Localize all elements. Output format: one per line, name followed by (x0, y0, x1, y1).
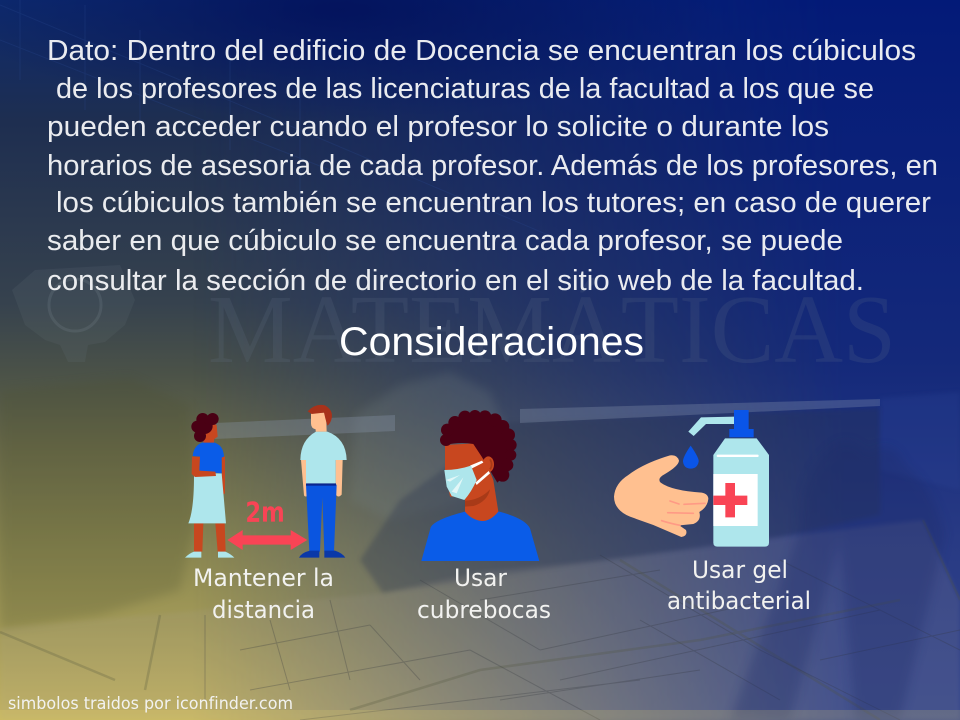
label: Mantener la distancia (193, 564, 334, 624)
icon: keep distance (185, 405, 347, 558)
icon: antibacterial gel (614, 410, 769, 547)
pump nozzle (688, 417, 735, 436)
man (299, 405, 347, 558)
drop (683, 446, 699, 469)
label: Usar gel antibacterial (667, 556, 811, 615)
label: Usar gel antibacterial: antibacterial (667, 587, 811, 615)
label: Usar cubrebocas (417, 564, 551, 624)
paver joints (205, 555, 960, 720)
label: Mantener la distancia: Mantener la (193, 564, 334, 592)
pavement (0, 520, 960, 720)
grass joints (0, 520, 960, 720)
wall band (215, 399, 880, 439)
heading: Consideraciones: Consideraciones (339, 320, 644, 364)
building window lines (0, 0, 560, 240)
intro text: dato: de los profesores de las licenciaturas de la facultad a los que se (56, 73, 874, 105)
top centre darkening (0, 0, 720, 120)
label: Usar cubrebocas: Usar (454, 564, 507, 592)
credit: simbolos traidos por iconfinder.com (8, 694, 293, 714)
arrow: 2m distance (227, 530, 307, 550)
bush middle (350, 372, 510, 520)
hedge (360, 408, 880, 593)
bottle (713, 438, 769, 547)
intro text: dato: Dato: Dentro del edificio de Docencia se encuentran los cúbiculos (47, 35, 916, 67)
intro text: dato: consultar la sección de directorio en el sitio web de la facultad. (47, 265, 864, 297)
woman (185, 413, 234, 558)
label: Usar gel antibacterial: Usar gel (692, 556, 788, 584)
icon: face mask (421, 410, 539, 561)
intro text: dato: horarios de asesoria de cada profesor. Además de los profesores, en (47, 150, 938, 182)
label: Mantener la distancia: distancia (212, 596, 315, 624)
shadows (730, 442, 945, 720)
intro text: dato: saber en que cúbiculo se encuentra cada profesor, se puede (47, 225, 843, 257)
bottom strip (0, 710, 960, 720)
hand (614, 455, 708, 537)
label: Usar cubrebocas: cubrebocas (417, 596, 551, 624)
seal (12, 265, 135, 362)
building name engraved: MATEMÁTICAS (208, 276, 896, 384)
intro text: dato: pueden acceder cuando el profesor lo solicite o durante los (47, 111, 829, 143)
intro text: dato (47, 35, 938, 297)
label: 2m: 2m (245, 495, 285, 528)
wall column right (880, 392, 960, 490)
hair (440, 410, 517, 483)
intro text: dato: los cúbiculos también se encuentran los tutores; en caso de querer (56, 187, 932, 219)
bush left (0, 378, 195, 630)
